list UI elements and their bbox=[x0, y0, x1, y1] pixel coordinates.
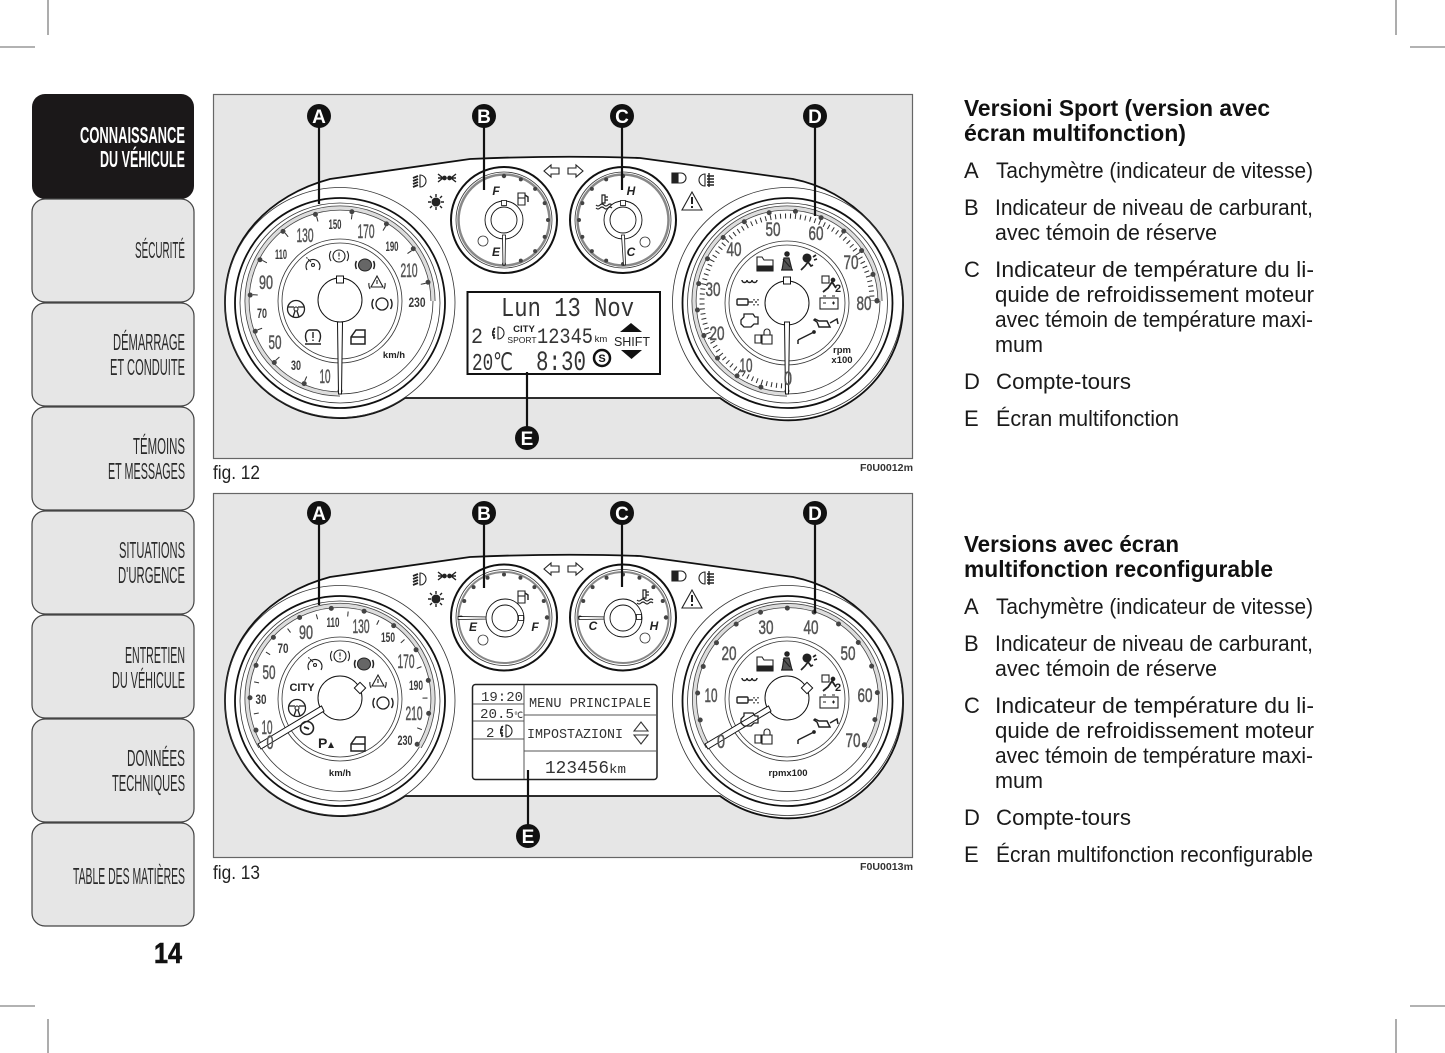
item C: avec témoin de température maxi- bbox=[995, 743, 1313, 768]
scale numbers: 10 bbox=[262, 718, 272, 739]
gauge D: tachometer bbox=[672, 188, 902, 418]
item E: E bbox=[964, 406, 979, 431]
scale numbers: 210 bbox=[406, 704, 422, 725]
scale numbers: 50 bbox=[840, 644, 856, 665]
scale numbers: 150 bbox=[328, 216, 342, 232]
item C: quide de refroidissement moteur bbox=[995, 718, 1314, 743]
tab: connaissance du véhicule bbox=[32, 94, 194, 199]
tab: démarrage et conduite: DÉMARRAGE bbox=[113, 329, 185, 355]
tab: sécurité: SÉCURITÉ bbox=[135, 237, 185, 263]
figure 13 caption: fig. 13 bbox=[213, 863, 260, 884]
figure 13: instrument cluster with reconfigurable display bbox=[214, 494, 912, 858]
needle bbox=[705, 706, 771, 749]
scale numbers: 90 bbox=[299, 623, 313, 644]
tab: situations d'urgence bbox=[32, 511, 194, 614]
tab: démarrage et conduite bbox=[32, 303, 194, 406]
heading: écran multifonction) bbox=[964, 120, 1186, 146]
gauge C: coolant temperature bbox=[570, 167, 676, 273]
warning icons: 2 bbox=[835, 283, 841, 295]
scale numbers: 0 bbox=[784, 369, 792, 390]
scale numbers: 230 bbox=[398, 732, 413, 748]
scale numbers: 30 bbox=[706, 280, 720, 301]
warning icons bbox=[737, 252, 841, 344]
tab: situations d'urgence: D'URGENCE bbox=[118, 562, 185, 588]
scale numbers: 60 bbox=[808, 224, 824, 245]
unit: km/h bbox=[383, 350, 405, 361]
scale numbers: 130 bbox=[352, 617, 370, 638]
multifunction display: km bbox=[595, 334, 607, 345]
gauge B: fuel bbox=[451, 564, 557, 670]
multifunction display: CITY bbox=[513, 324, 535, 335]
callout B: B bbox=[477, 107, 491, 128]
callout D: D bbox=[808, 504, 822, 525]
unit: x100 bbox=[831, 355, 853, 366]
figure frame bbox=[214, 494, 912, 858]
figure 12 code: F0U0012m bbox=[860, 463, 913, 474]
scale numbers: 70 bbox=[257, 305, 267, 321]
callout A bbox=[307, 501, 331, 605]
scale numbers: 170 bbox=[398, 652, 414, 673]
item B: B bbox=[964, 195, 979, 220]
scale numbers: 30 bbox=[291, 357, 301, 373]
reconfigurable display bbox=[472, 684, 657, 780]
tab: entretien du véhicule bbox=[32, 615, 194, 718]
scale numbers: 10 bbox=[320, 367, 330, 388]
gauge B: fuel: E bbox=[469, 620, 478, 634]
heading: Versions avec écran bbox=[964, 531, 1179, 557]
warning icons: CITY bbox=[289, 682, 315, 694]
needle bbox=[338, 322, 342, 394]
scale numbers: 0 bbox=[266, 733, 274, 754]
callout C: C bbox=[615, 504, 629, 525]
callout B: B bbox=[477, 504, 491, 525]
callout B bbox=[472, 104, 496, 190]
item C: C bbox=[964, 257, 980, 282]
needle bbox=[258, 706, 324, 749]
tab: données techniques: TECHNIQUES bbox=[112, 770, 185, 796]
item A: A bbox=[964, 594, 979, 619]
heading: Versioni Sport (version avec bbox=[964, 95, 1270, 121]
tab: connaissance du véhicule: DU VÉHICULE bbox=[100, 145, 185, 172]
warning icons bbox=[288, 650, 393, 751]
gauge B: fuel: F bbox=[492, 184, 500, 198]
item E: Écran multifonction reconfigurable bbox=[996, 842, 1313, 867]
multifunction display: 12345 bbox=[537, 325, 593, 350]
figure 12: instrument cluster with multifunction display bbox=[214, 94, 912, 458]
tab: entretien du véhicule: ENTRETIEN bbox=[125, 642, 185, 668]
callout C bbox=[610, 104, 634, 190]
scale numbers: 20 bbox=[722, 644, 736, 665]
item B bbox=[964, 195, 1313, 245]
gauge D: tachometer bbox=[672, 586, 902, 816]
scale numbers: 150 bbox=[381, 629, 395, 645]
page number: 14 bbox=[154, 938, 182, 970]
callout E: E bbox=[522, 827, 534, 848]
reconfigurable display: 19:20 bbox=[481, 690, 523, 706]
item B: B bbox=[964, 631, 979, 656]
figure frame bbox=[214, 94, 912, 458]
multifunction display: 8:30 bbox=[536, 348, 586, 379]
warning icons bbox=[737, 652, 841, 744]
callout C bbox=[610, 501, 634, 587]
tab: sécurité bbox=[32, 199, 194, 302]
icon: fuel pump bbox=[518, 591, 528, 603]
icon: temperature bbox=[637, 590, 653, 604]
reconfigurable display: MENU PRINCIPALE bbox=[529, 696, 651, 712]
heading bbox=[964, 531, 1273, 582]
scale numbers: 130 bbox=[296, 226, 314, 247]
scale numbers bbox=[706, 220, 872, 390]
item E: E bbox=[964, 842, 979, 867]
tab: situations d'urgence: SITUATIONS bbox=[119, 537, 185, 563]
item B: avec témoin de réserve bbox=[995, 656, 1217, 681]
item C bbox=[964, 257, 1314, 357]
warning icons: P bbox=[318, 735, 327, 751]
scale numbers: 230 bbox=[408, 294, 426, 310]
item D: Compte-tours bbox=[996, 805, 1131, 830]
scale numbers: 210 bbox=[400, 261, 418, 282]
callout B bbox=[472, 501, 496, 588]
callout A: A bbox=[312, 107, 326, 128]
scale numbers: 50 bbox=[268, 333, 282, 354]
item D: D bbox=[964, 369, 980, 394]
needle bbox=[784, 322, 790, 394]
item A: A bbox=[964, 158, 979, 183]
item C: Indicateur de température du li- bbox=[995, 693, 1314, 718]
item A: Tachymètre (indicateur de vitesse) bbox=[996, 594, 1313, 619]
tab: témoins et messages bbox=[32, 407, 194, 510]
unit bbox=[831, 345, 853, 366]
gauge C: coolant temperature: C bbox=[589, 619, 598, 633]
scale numbers: 70 bbox=[846, 731, 860, 752]
dashboard outline bbox=[225, 555, 903, 818]
gauge B: fuel bbox=[451, 167, 557, 273]
callout C: C bbox=[615, 107, 629, 128]
scale numbers: 50 bbox=[262, 663, 276, 684]
scale numbers: 40 bbox=[804, 618, 818, 639]
item B: Indicateur de niveau de carburant, bbox=[995, 195, 1313, 220]
tab: démarrage et conduite: ET CONDUITE bbox=[110, 354, 185, 380]
item C: C bbox=[964, 693, 980, 718]
scale numbers: 110 bbox=[275, 246, 287, 262]
scale numbers: 80 bbox=[856, 294, 872, 315]
figure 12 caption: fig. 12 bbox=[213, 463, 260, 484]
multifunction display: Lun 13 Nov bbox=[501, 295, 634, 325]
scale numbers: 190 bbox=[386, 238, 399, 254]
tab: connaissance du véhicule: CONNAISSANCE bbox=[80, 122, 185, 148]
callout A bbox=[307, 104, 331, 204]
scale numbers: 70 bbox=[844, 253, 858, 274]
item C: mum bbox=[995, 768, 1043, 793]
reconfigurable display: 2 bbox=[486, 726, 494, 742]
scale numbers bbox=[257, 216, 426, 388]
tab: données techniques: DONNÉES bbox=[127, 745, 185, 771]
heading: multifonction reconfigurable bbox=[964, 556, 1273, 582]
reconfigurable display: ℃ bbox=[514, 711, 523, 721]
callout D bbox=[803, 501, 827, 613]
callout A: A bbox=[312, 504, 326, 525]
item D: Compte-tours bbox=[996, 369, 1131, 394]
figure 13 code: F0U0013m bbox=[860, 862, 913, 873]
scale numbers: 170 bbox=[358, 222, 374, 243]
scale numbers: 60 bbox=[858, 686, 872, 707]
tab: table des matières bbox=[32, 823, 194, 926]
scale numbers: 50 bbox=[766, 220, 780, 241]
multifunction display: 2 bbox=[471, 325, 483, 350]
tab: données techniques bbox=[32, 719, 194, 822]
item E: Écran multifonction bbox=[996, 406, 1179, 431]
item C: quide de refroidissement moteur bbox=[995, 282, 1314, 307]
gauge C: coolant temperature bbox=[570, 564, 676, 670]
callout E bbox=[516, 770, 540, 848]
scale numbers: 40 bbox=[726, 240, 742, 261]
callout D bbox=[803, 104, 827, 216]
multifunction display: SPORT bbox=[507, 335, 537, 345]
tell-tale icons bbox=[413, 563, 714, 608]
scale numbers: 90 bbox=[259, 273, 273, 294]
reconfigurable display: IMPOSTAZIONI bbox=[527, 727, 623, 743]
gauge C: coolant temperature: H bbox=[650, 619, 659, 633]
reconfigurable display: 20.5 bbox=[480, 707, 514, 723]
gauge B: fuel: E bbox=[492, 245, 501, 259]
heading bbox=[964, 95, 1270, 146]
scale numbers: 190 bbox=[409, 677, 423, 693]
item C: Indicateur de température du li- bbox=[995, 257, 1314, 282]
text block: Versions avec écran multifonction reconfigurable bbox=[964, 531, 1314, 867]
item C bbox=[964, 693, 1314, 793]
warning icons bbox=[288, 250, 392, 344]
item B bbox=[964, 631, 1313, 681]
multifunction display bbox=[468, 292, 660, 379]
callout E: E bbox=[521, 429, 533, 450]
item A: Tachymètre (indicateur de vitesse) bbox=[996, 158, 1313, 183]
item C: mum bbox=[995, 332, 1043, 357]
gauge A: speedometer bbox=[225, 586, 455, 816]
dashboard outline bbox=[225, 157, 903, 420]
scale numbers: 0 bbox=[717, 732, 725, 753]
scale numbers: 20 bbox=[710, 324, 724, 345]
tab: entretien du véhicule: DU VÉHICULE bbox=[112, 667, 185, 693]
gauge A: speedometer bbox=[225, 188, 455, 418]
gauge C: coolant temperature: C bbox=[627, 245, 636, 259]
reconfigurable display: 123456 bbox=[545, 759, 609, 779]
item B: avec témoin de réserve bbox=[995, 220, 1217, 245]
sidebar navigation bbox=[32, 94, 194, 926]
scale numbers: 110 bbox=[326, 614, 340, 630]
icon: fuel pump bbox=[518, 193, 528, 205]
multifunction display: SHIFT bbox=[614, 335, 650, 349]
reconfigurable display: km bbox=[609, 762, 626, 777]
multifunction display: S bbox=[598, 353, 606, 365]
unit: km/h bbox=[329, 768, 351, 779]
scale numbers: 30 bbox=[256, 691, 267, 707]
callout D: D bbox=[808, 107, 822, 128]
item B: Indicateur de niveau de carburant, bbox=[995, 631, 1313, 656]
item D: D bbox=[964, 805, 980, 830]
scale numbers bbox=[256, 614, 423, 754]
scale numbers: 10 bbox=[704, 686, 718, 707]
callout E bbox=[515, 372, 539, 450]
scale numbers: 10 bbox=[740, 356, 752, 377]
gauge B: fuel: F bbox=[531, 620, 539, 634]
scale numbers: 30 bbox=[758, 618, 774, 639]
warning icons: 2 bbox=[835, 682, 841, 694]
icon: temperature bbox=[596, 195, 612, 209]
scale numbers: 70 bbox=[278, 640, 289, 656]
tab: témoins et messages: TÉMOINS bbox=[133, 433, 185, 459]
item C: avec témoin de température maxi- bbox=[995, 307, 1313, 332]
tell-tale icons bbox=[413, 165, 714, 210]
multifunction display: 20℃ bbox=[472, 351, 513, 378]
unit: rpm bbox=[833, 345, 851, 356]
tab: témoins et messages: ET MESSAGES bbox=[108, 458, 185, 484]
scale numbers bbox=[704, 618, 872, 753]
text: TABLE DES MATIÈRES bbox=[73, 863, 185, 889]
gauge C: coolant temperature: H bbox=[627, 184, 636, 198]
unit: rpmx100 bbox=[768, 768, 808, 779]
text block: Versioni Sport bbox=[964, 95, 1314, 431]
